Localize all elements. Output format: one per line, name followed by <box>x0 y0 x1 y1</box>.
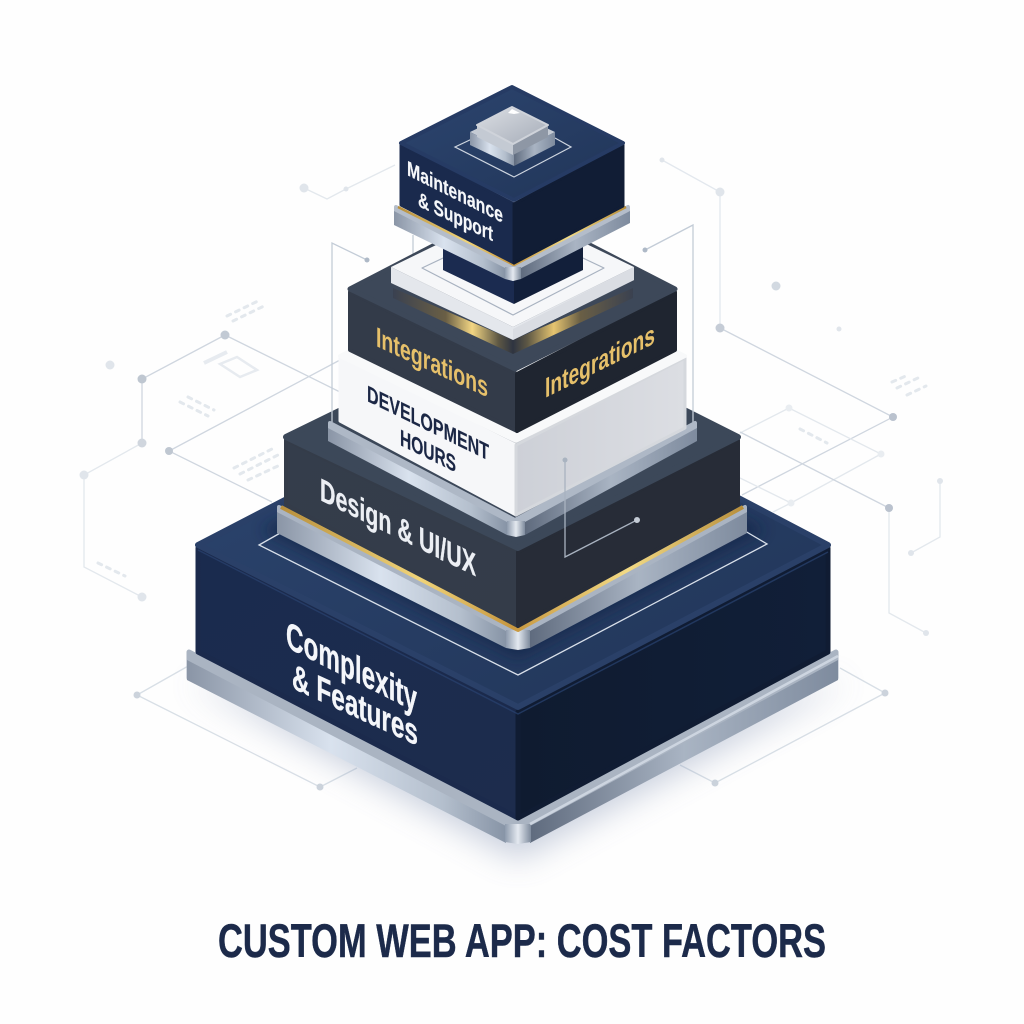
dark block faces <box>350 205 675 431</box>
title: CUSTOM WEB APP: COST FACTORS <box>218 914 826 967</box>
tier 1: complexity and features <box>186 496 838 844</box>
side connector lines <box>332 225 693 430</box>
connector on white block <box>562 458 640 557</box>
label: design and UI/UX: Design & UI/UX <box>320 472 476 584</box>
navy cube faces <box>401 87 623 263</box>
label: maintenance and support: & Support <box>418 187 493 246</box>
inset outline on cube top <box>455 138 571 177</box>
dark block faces <box>286 325 738 626</box>
label: integrations left: Integrations <box>376 321 488 404</box>
silver plate <box>328 423 697 537</box>
label: complexity and features: Complexity <box>286 613 417 721</box>
background circuit network <box>80 158 943 790</box>
ground shadow <box>187 680 850 860</box>
label: development hours <box>367 381 489 478</box>
silver base plate <box>187 652 838 844</box>
gold glow band <box>393 288 633 354</box>
tier 6: maintenance and support cube <box>394 87 630 281</box>
label: complexity and features <box>286 613 418 755</box>
navy block faces <box>195 496 831 820</box>
label: complexity and features: & Features <box>292 657 418 755</box>
label: maintenance and support: Maintenance <box>407 156 503 228</box>
label: development hours: DEVELOPMENT <box>367 381 489 466</box>
inset outline on platform <box>422 225 604 315</box>
label: integrations right: Integrations <box>545 318 655 405</box>
tier 2: design and UI/UX <box>277 325 747 650</box>
tier 3: development hours <box>328 270 697 557</box>
icon: silver button <box>470 107 555 166</box>
inset outline on base top <box>259 531 767 675</box>
tier 4: integrations <box>350 205 675 431</box>
tier 5: white platform <box>391 208 634 340</box>
infographic canvas <box>80 85 943 958</box>
silver and gold ring <box>394 207 630 281</box>
neck between platform and cube <box>443 240 583 304</box>
silver and gold plate <box>277 507 747 650</box>
label: development hours: HOURS <box>400 425 456 478</box>
white block faces <box>340 270 685 515</box>
